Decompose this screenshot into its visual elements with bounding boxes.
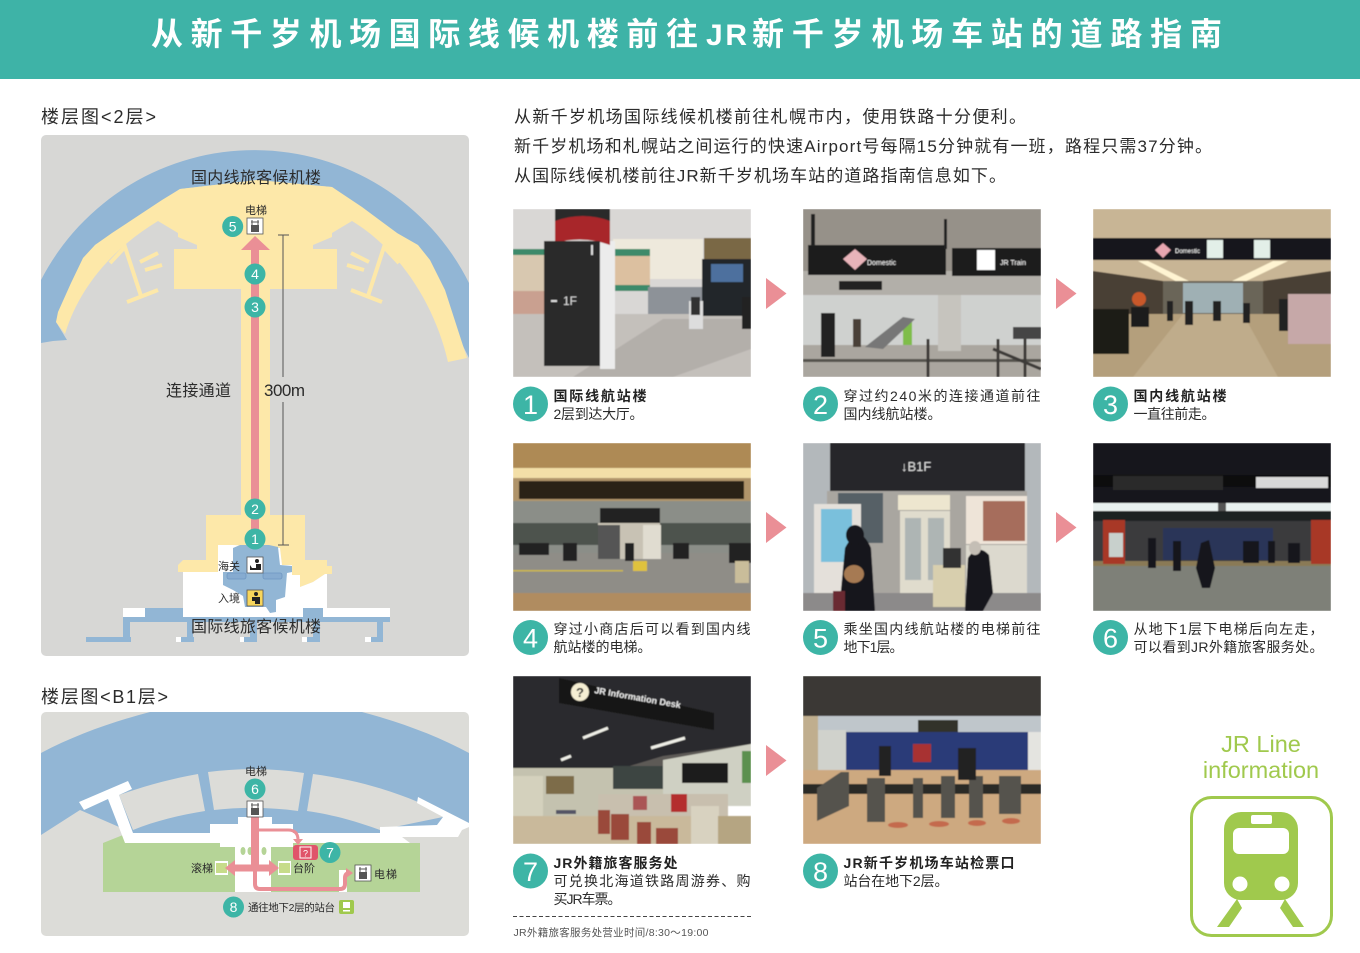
label: elevator: 电梯 <box>245 204 267 217</box>
step 2 caption: 穿过约240米的连接通道前往 <box>844 388 1040 404</box>
icon: elevator <box>247 218 263 234</box>
photo 7: JR information desk: JR Information Desk <box>594 685 683 710</box>
photo 1: departure hall pillar sign <box>513 209 751 377</box>
step 2 caption <box>803 386 1040 422</box>
icon: elevator B1 center <box>247 801 263 817</box>
title banner: 新千岁机场车站的道路指南 <box>752 16 1222 52</box>
photo 5: domestic terminal elevator <box>803 443 1041 611</box>
label: to platform: 通往地下2层的站台 <box>248 901 335 914</box>
scale bar 300m <box>264 235 305 545</box>
step 1 caption: 2层到达大厅。 <box>554 406 644 422</box>
icon: customs <box>247 557 263 573</box>
international terminal blue area <box>223 545 292 613</box>
step 3 caption <box>1093 386 1226 422</box>
boarding bridges left <box>110 247 162 302</box>
JR Line information block: JR Line <box>1221 731 1301 757</box>
step 2 caption: 2 <box>813 390 828 420</box>
step 2 caption: 国内线航站楼。 <box>844 406 942 422</box>
label: connecting corridor: 连接通道 <box>166 382 231 400</box>
step 3 caption: 3 <box>1103 390 1118 420</box>
icon: immigration <box>247 590 263 606</box>
panel: floor map 2F <box>41 135 469 656</box>
marker 5: 5 <box>229 218 237 234</box>
title banner: 从新千岁机场国际线候机楼前往 <box>151 16 698 52</box>
marker 7 <box>320 842 340 863</box>
photo 1: departure hall pillar sign: 1F <box>563 294 577 308</box>
photo 4: shops and elevator hall <box>513 443 751 611</box>
marker 2: 2 <box>251 501 259 517</box>
heading: floor map 2F: 楼层图<2层> <box>41 107 156 127</box>
label: international terminal: 国际线旅客候机楼 <box>191 618 321 636</box>
step 6 caption: 从地下1层下电梯后向左走， <box>1134 621 1324 637</box>
photo 8: ticket gates <box>803 676 1041 844</box>
international terminal apron <box>86 608 390 642</box>
intro text: 新千岁机场和札幌站之间运行的快速Airport号每隔15分钟就有一班，路程只需37分钟。 <box>514 137 1212 156</box>
note: JR desk opening hours: JR外籍旅客服务处营业时间/8:30〜19:00 <box>514 926 709 939</box>
label: domestic terminal: 国内线旅客候机楼 <box>191 169 321 187</box>
marker 1: 1 <box>251 531 259 547</box>
JR Line information block: information <box>1203 757 1319 783</box>
icon: info desk <box>293 845 318 860</box>
step 7 caption: 买JR车票。 <box>554 891 622 907</box>
step 4 caption <box>513 620 750 655</box>
route arrows <box>232 815 350 889</box>
icon: info desk: ? <box>303 848 308 858</box>
step 5 caption: 地下1层。 <box>844 639 904 655</box>
title banner <box>0 0 1360 79</box>
label: elevator top: 电梯 <box>245 765 267 778</box>
underground blue area <box>41 712 469 835</box>
step 8 caption: JR新千岁机场车站检票口 <box>844 855 1014 871</box>
photo 2: connecting corridor signs: JR Train <box>1000 260 1026 267</box>
step 5 caption <box>803 620 1040 655</box>
title banner: JR <box>706 19 747 52</box>
white corridors <box>79 781 469 892</box>
photo 5: domestic terminal elevator: ↓B1F <box>901 459 931 474</box>
step 8 caption <box>803 854 1014 889</box>
photo 2: connecting corridor signs <box>803 209 1041 377</box>
marker 6 <box>244 778 266 800</box>
marker 4 <box>244 264 266 284</box>
grey islands <box>119 769 443 830</box>
photo 7: JR information desk <box>513 676 751 844</box>
photo 3: domestic terminal concourse: Domestic <box>1175 249 1200 255</box>
label: escalator: 滚梯 <box>191 861 213 875</box>
panel: floor map B1 <box>41 712 469 936</box>
label: stairs: 台阶 <box>293 861 315 875</box>
step 6 caption <box>1093 620 1324 655</box>
marker 1 <box>244 528 266 550</box>
photo 2: connecting corridor signs: Domestic <box>867 260 897 267</box>
step 1 caption: 1 <box>523 390 538 420</box>
step 7 caption <box>513 854 750 907</box>
step 7 caption: JR外籍旅客服务处 <box>554 855 678 871</box>
step 3 caption: 国内线航站楼 <box>1134 388 1226 404</box>
step 1 caption <box>513 386 646 422</box>
JR Line information block <box>1192 731 1332 936</box>
step 6 caption: 可以看到JR外籍旅客服务处。 <box>1134 639 1324 655</box>
scale bar 300m: 300m <box>264 381 305 400</box>
arrow: step 2 to 3 <box>1056 278 1076 309</box>
marker 4: 4 <box>251 266 259 282</box>
step 4 caption: 4 <box>523 624 538 654</box>
icon: train <box>1192 798 1332 936</box>
arrow: step 1 to 2 <box>766 278 786 309</box>
lower area <box>103 835 420 892</box>
marker 3: 3 <box>251 299 259 315</box>
icon: escalator <box>215 861 228 875</box>
domestic terminal and connecting corridor <box>56 180 467 587</box>
label: immigration: 入境 <box>218 591 240 605</box>
arrow: step 4 to 5 <box>766 512 786 543</box>
step 4 caption: 穿过小商店后可以看到国内线 <box>554 621 750 637</box>
route arrow <box>241 236 270 540</box>
heading: floor map B1: 楼层图<B1层> <box>41 687 168 707</box>
arrow: step 7 to 8 <box>766 745 786 776</box>
step 4 caption: 航站楼的电梯。 <box>554 639 652 655</box>
intro text: 从国际线候机楼前往JR新千岁机场车站的道路指南信息如下。 <box>514 166 1006 186</box>
marker 6: 6 <box>251 781 259 797</box>
marker 8 <box>223 896 244 918</box>
icon: stairs <box>278 861 291 875</box>
green ovals <box>240 847 266 855</box>
label: elevator right: 电梯 <box>374 868 397 881</box>
step 5 caption: 乘坐国内线航站楼的电梯前往 <box>844 621 1040 637</box>
step 5 caption: 5 <box>813 624 828 654</box>
photo 3: domestic terminal concourse <box>1093 209 1331 377</box>
intro text <box>514 106 1212 186</box>
marker 5 <box>222 216 243 237</box>
marker 7: 7 <box>326 844 334 860</box>
photo 7: JR information desk: ? <box>576 685 584 700</box>
icon: train small <box>339 900 354 914</box>
arrow: step 5 to 6 <box>1056 512 1076 543</box>
photo 6: basement hall <box>1093 443 1331 611</box>
marker 2 <box>244 498 266 520</box>
international terminal white floor <box>123 545 390 617</box>
step 3 caption: 一直往前走。 <box>1134 406 1216 422</box>
runway-side blue apron <box>41 150 469 358</box>
step 1 caption: 国际线航站楼 <box>554 388 646 404</box>
step 6 caption: 6 <box>1103 624 1118 654</box>
step 8 caption: 站台在地下2层。 <box>844 873 948 889</box>
label: customs: 海关 <box>218 559 240 573</box>
step 8 caption: 8 <box>813 857 828 887</box>
step 7 caption: 可兑换北海道铁路周游券、购 <box>554 873 750 889</box>
marker 8: 8 <box>230 899 238 915</box>
intro text: 从新千岁机场国际线候机楼前往札幌市内，使用铁路十分便利。 <box>514 106 1026 126</box>
customs counters <box>227 573 282 579</box>
boarding bridges right <box>347 247 399 302</box>
step 7 caption: 7 <box>523 857 538 887</box>
marker 3 <box>244 296 266 318</box>
icon: elevator B1 right <box>355 865 371 881</box>
